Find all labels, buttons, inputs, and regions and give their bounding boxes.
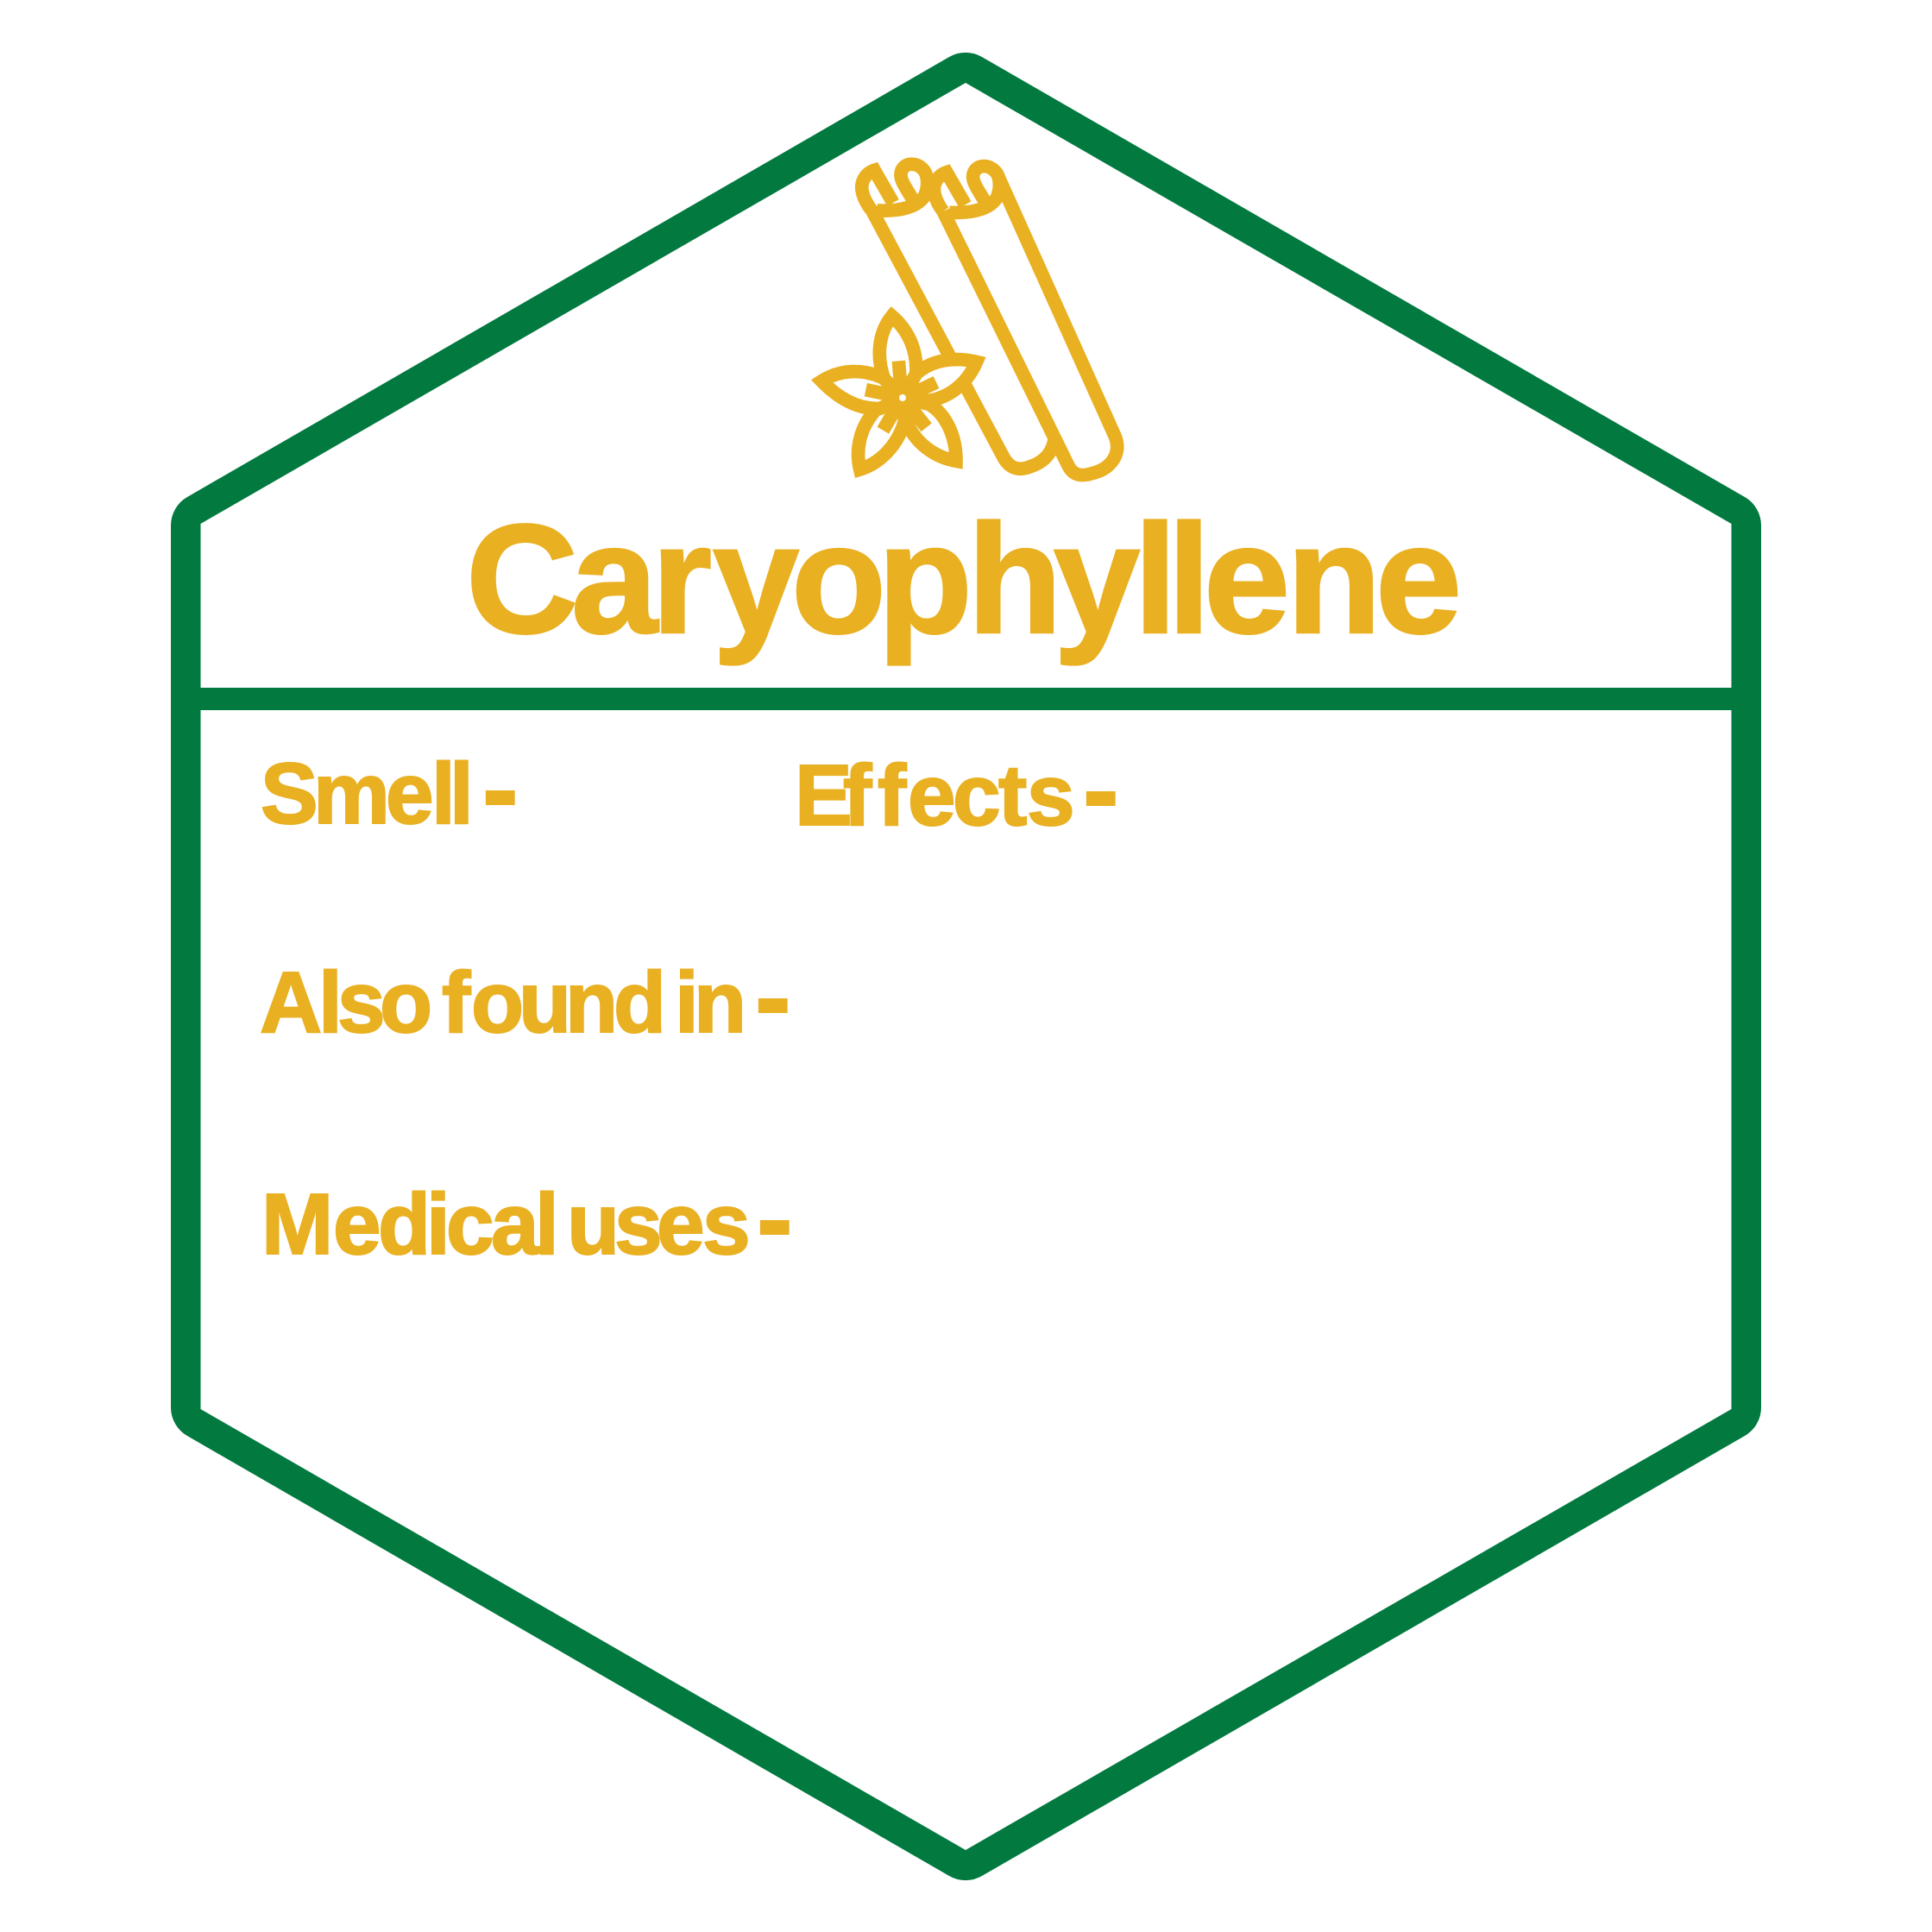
icon: star anise centre dot [899,394,906,401]
icon: cinnamon sticks and star anise [821,164,1117,475]
label: also found in: - [755,937,791,1057]
label: effects: Effects [795,747,1075,844]
label: effects: - [1083,730,1119,850]
icon: right stick top cap [991,171,1005,184]
label: medical uses: Medicaluses [261,1176,751,1273]
icon: right cinnamon stick [934,167,1117,475]
icon: star anise petals [821,316,977,469]
divider line [200,688,1732,710]
label: smell: - [482,729,519,849]
label: smell: Smell [261,746,474,842]
icon: left cinnamon stick [862,164,1054,469]
label: also found in: Alsofoundin [260,954,746,1051]
title: Caryophyllene [466,493,1462,666]
label: medical uses: - [757,1159,793,1279]
icon: star anise stamens [865,361,936,431]
hexagon frame [171,53,1761,1880]
icon: star anise centre [888,383,917,412]
